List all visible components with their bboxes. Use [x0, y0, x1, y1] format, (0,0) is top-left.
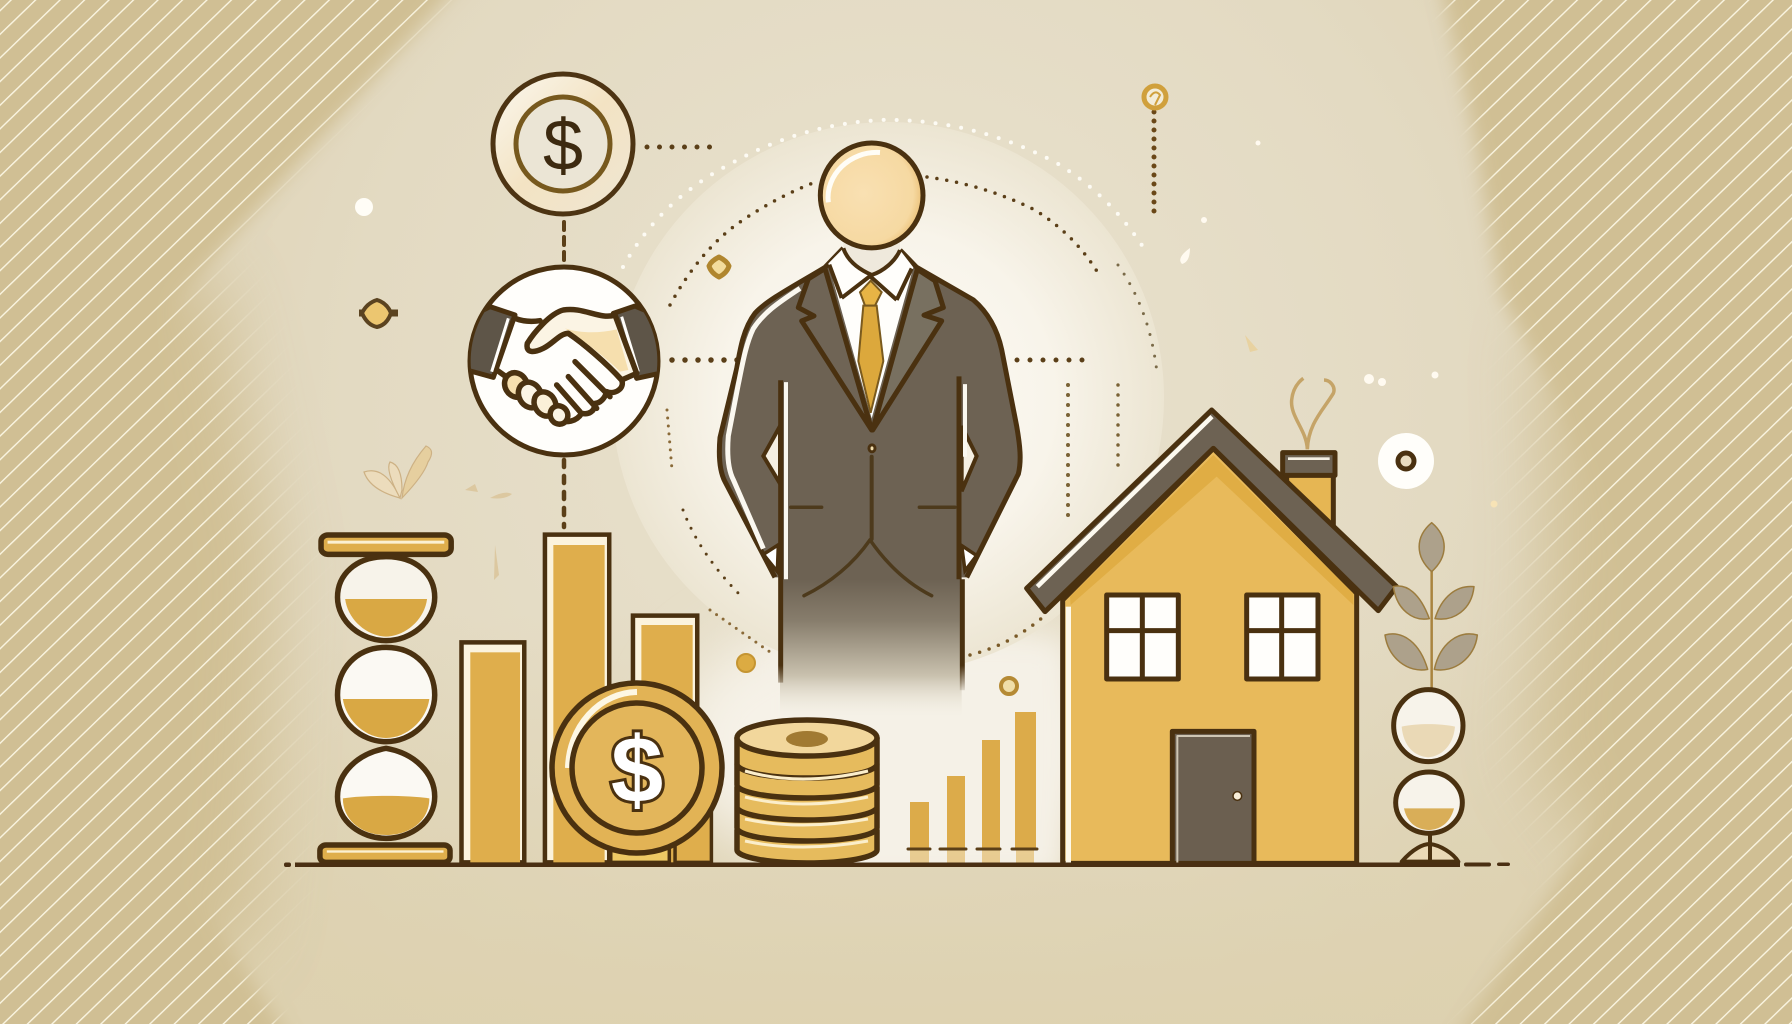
- ornament: white target ring: [1378, 433, 1434, 489]
- ornament: gold dot: [737, 654, 755, 672]
- jacket details: [791, 457, 955, 596]
- bar 2: [545, 535, 609, 862]
- bar chart: [461, 535, 711, 862]
- small ornaments: [355, 86, 1498, 694]
- smoke: [1292, 378, 1334, 449]
- coin highlights: [745, 771, 868, 847]
- ornament: gold ring: [1001, 678, 1017, 694]
- body side lines: [781, 376, 962, 690]
- ornament: gold diamond near arc: [709, 257, 729, 277]
- top coin icon: [493, 74, 633, 214]
- lower globe: [1396, 772, 1462, 833]
- wall highlight: [1066, 607, 1071, 863]
- businessman figure: [719, 143, 1020, 719]
- collar lines: [829, 248, 912, 300]
- base: [1402, 844, 1458, 862]
- hands: [497, 309, 637, 427]
- handshake icon: [467, 267, 660, 455]
- white dotted arc: [623, 120, 1145, 267]
- left hourglass: [320, 535, 451, 862]
- upper bulb: [338, 557, 435, 641]
- large dollar coin: [552, 683, 722, 853]
- small rising bars: [908, 712, 1037, 863]
- ornament: sparkle dots: [1180, 140, 1498, 508]
- ornament: medal top right: [1144, 86, 1166, 108]
- lower bulb: [338, 748, 435, 838]
- door: [1172, 731, 1254, 863]
- sleeve cuff highlights: [492, 317, 638, 372]
- bar 1: [461, 642, 524, 862]
- top coin face: [737, 720, 877, 756]
- ground line: [284, 862, 1510, 867]
- stem: [1430, 570, 1433, 688]
- potted plant hourglass: [1385, 523, 1477, 862]
- top coin emblem: [786, 731, 828, 747]
- neck: [843, 242, 900, 274]
- coin stack: [737, 720, 877, 863]
- upper globe: [1394, 690, 1463, 762]
- roof: [1027, 410, 1397, 612]
- ornament: faded leaf sprig: [364, 446, 432, 498]
- top bar: [321, 535, 451, 554]
- left window: [1107, 595, 1178, 679]
- right window: [1247, 595, 1318, 679]
- central glow circle: [612, 122, 1164, 880]
- coin layers: [737, 724, 877, 863]
- necktie: [858, 281, 883, 413]
- left sleeve: [467, 307, 515, 377]
- house: [1027, 378, 1397, 863]
- jacket button: [869, 445, 875, 452]
- lapels and collar: [798, 268, 943, 430]
- top coin icon: $: [543, 106, 583, 186]
- arm gaps and cuffs: [763, 382, 977, 579]
- middle bulb: [338, 647, 435, 742]
- shirt: [828, 248, 913, 419]
- suit jacket: [719, 248, 1020, 719]
- jacket outline: [719, 248, 1020, 577]
- right sleeve: [613, 306, 660, 378]
- head: [820, 143, 923, 248]
- bottom bar: [320, 845, 450, 862]
- roof highlight: [1037, 417, 1212, 587]
- ornament: faint marks: [465, 335, 1258, 580]
- walls: [1063, 448, 1357, 863]
- gable shading: [1070, 455, 1353, 605]
- arm highlight: [728, 288, 800, 549]
- ornament: white dot: [355, 198, 373, 216]
- large dollar coin: $: [611, 717, 663, 822]
- bar 3: [633, 616, 711, 862]
- ornament: left diamond: [359, 300, 398, 327]
- leaves: [1385, 523, 1477, 670]
- coin supports: [611, 843, 669, 862]
- chimney: [1283, 453, 1335, 532]
- dotted connector lines: [564, 112, 1157, 655]
